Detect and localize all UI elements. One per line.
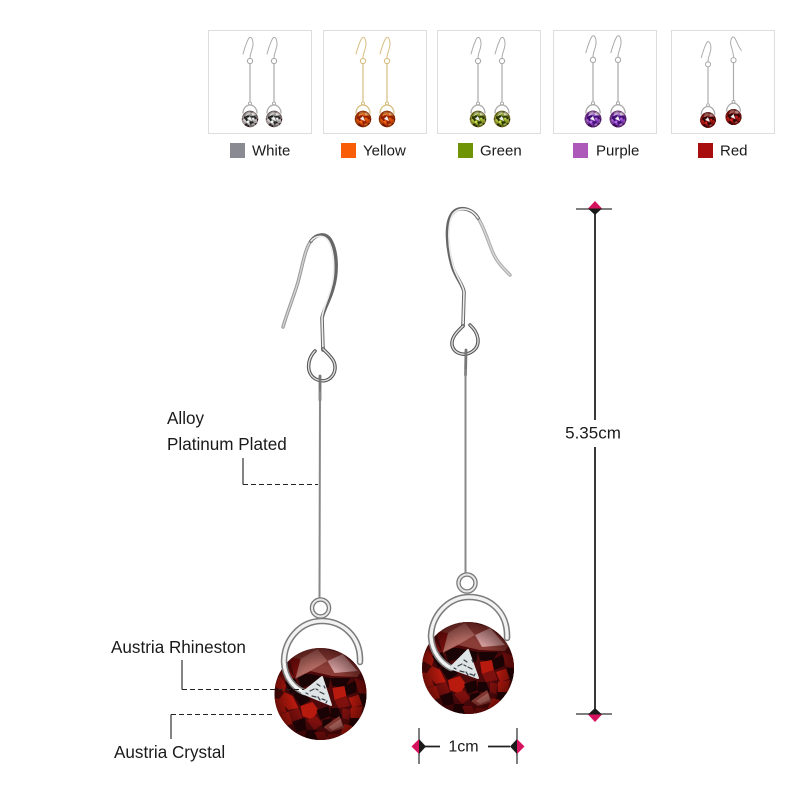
swatch panel: purple: [554, 30, 656, 160]
swatch panel: yellow: Yellow: [363, 142, 406, 160]
height dimension: 5.35cm: 5.35cm: [565, 424, 621, 442]
swatch panel: purple: Purple: [596, 142, 639, 160]
swatch panel: green: [438, 30, 540, 160]
right earring: [421, 209, 515, 716]
swatch panel: red: Red: [720, 142, 748, 160]
swatch panel: green: Green: [480, 142, 522, 160]
width dimension: 1cm: [412, 728, 524, 764]
swatch panel: red: [672, 30, 774, 160]
width dimension: 1cm: 1cm: [448, 738, 479, 756]
swatch panel: yellow: [324, 30, 426, 160]
label: alloy platinum plated: Alloy: [167, 409, 205, 428]
swatch panel: white: White: [252, 142, 290, 160]
label: austria crystal: Austria Crystal: [114, 743, 225, 762]
height dimension: 5.35cm: [565, 201, 621, 722]
label: alloy platinum plated: [167, 409, 318, 484]
label: alloy platinum plated: Platinum Plated: [167, 435, 287, 454]
label: austria rhinestone: Austria Rhineston: [111, 638, 246, 657]
left earring: [274, 235, 368, 742]
swatch panel: white: [208, 30, 312, 160]
